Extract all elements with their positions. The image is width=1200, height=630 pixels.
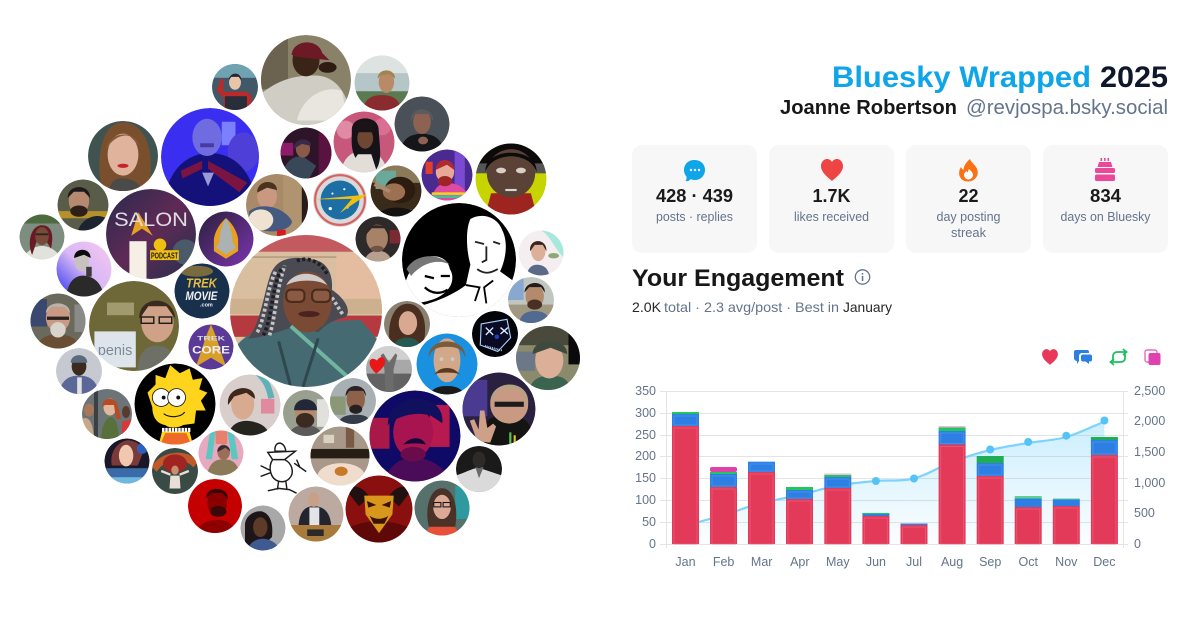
avatar: waving person with glasses xyxy=(462,372,536,446)
avatar: Trek Movie logo: MOVIE xyxy=(185,289,218,303)
avatar: shield badge xyxy=(198,212,254,266)
stat card: days on Bluesky xyxy=(1043,145,1168,253)
avatar: cartoon crew xyxy=(82,389,132,439)
avatar: smiling man with art wall xyxy=(220,374,280,436)
month labels: May xyxy=(826,555,850,569)
avatar: cartoon man on yellow xyxy=(476,144,546,214)
icon: replies legend xyxy=(1074,350,1092,364)
bars: Sep xyxy=(977,456,1004,544)
avatar: presenter at podium xyxy=(288,486,344,542)
month labels: Nov xyxy=(1055,555,1078,569)
avatar: Trek Core logo: TREK xyxy=(197,336,225,343)
profile name and handle: Joanne Robertson xyxy=(780,97,957,119)
icon: likes legend xyxy=(1042,349,1058,365)
engagement summary: January xyxy=(843,299,892,315)
left axis labels: 100 xyxy=(635,493,656,507)
month labels: Mar xyxy=(751,555,772,569)
avatar: man in grey cap, street xyxy=(516,326,580,390)
avatar: Trek Movie logo: .com xyxy=(200,302,213,308)
avatar: man on blue background with moustache xyxy=(416,334,478,394)
avatar: dark-haired man xyxy=(356,216,400,262)
left axis labels: 250 xyxy=(635,428,656,442)
stat card: likes xyxy=(769,145,894,253)
stacked bars xyxy=(672,412,1118,544)
stat card: likes: 1.7K xyxy=(812,186,850,206)
engagement summary: total · 2.3 avg/post · Best in xyxy=(664,299,839,315)
left axis labels xyxy=(635,384,656,551)
avatar: Trek Movie logo: TREK xyxy=(186,276,218,291)
avatar: older man with glasses xyxy=(30,294,86,348)
bars: Jul xyxy=(900,524,928,544)
avatar: woman with glasses xyxy=(414,480,470,536)
avatar: woman in dark xyxy=(394,96,450,152)
icon: chat bubble xyxy=(684,160,705,181)
avatar: star fleet logo xyxy=(313,173,367,227)
stat card: posts and replies xyxy=(632,145,757,253)
combo chart: monthly engagement xyxy=(635,384,1165,569)
cumulative area and line xyxy=(686,416,1108,544)
avatar: woman in white xyxy=(20,214,64,260)
bars: Aug xyxy=(939,426,966,544)
avatar: Trek Movie logo xyxy=(174,264,230,318)
month labels: Aug xyxy=(941,555,963,569)
avatar: bearded man in cap xyxy=(283,390,329,436)
left axis labels: 0 xyxy=(649,537,656,551)
avatar: bearded man xyxy=(58,180,108,230)
avatar: man holding sign: penis xyxy=(98,343,132,359)
engagement summary: 2.0K xyxy=(632,299,662,315)
avatar: man holding sign xyxy=(89,281,179,371)
stat card: posts and replies: posts · replies xyxy=(656,210,733,224)
avatar: Trek Core logo xyxy=(188,324,234,370)
avatar: man with pale teal background xyxy=(518,230,564,276)
right axis labels: 500 xyxy=(1134,506,1155,520)
avatar: main portrait, woman with grey braids xyxy=(230,235,382,387)
engagement summary xyxy=(632,299,892,315)
icon: heart xyxy=(821,159,843,181)
bars: Nov xyxy=(1053,498,1080,544)
month labels xyxy=(675,555,1116,569)
left axis labels: 300 xyxy=(635,406,656,420)
avatar: woman in plaid xyxy=(240,506,286,550)
stat card: streak: streak xyxy=(951,226,987,240)
bars: Apr xyxy=(786,487,813,544)
left axis labels: 50 xyxy=(642,515,656,529)
icon: cake xyxy=(1095,158,1115,181)
avatar: Trek Core logo: CORE xyxy=(192,344,230,356)
bars: Mar xyxy=(748,461,775,544)
avatar: man with a cap, beach xyxy=(508,277,554,323)
right axis labels: 0 xyxy=(1134,537,1141,551)
avatar: line-drawn doodle xyxy=(251,438,311,498)
stat card: days on Bluesky: 834 xyxy=(1090,186,1121,206)
avatar: man in red cap xyxy=(261,35,351,125)
avatar: blond man outdoors xyxy=(354,56,410,110)
avatar: woman with red lips xyxy=(88,121,158,191)
avatar: smiling woman brown hair xyxy=(384,301,430,347)
avatar: man with plush whale xyxy=(246,174,308,236)
avatar cluster xyxy=(20,35,580,550)
avatar: rainbow cartoon xyxy=(422,150,472,200)
icon: reposts legend xyxy=(1110,349,1126,365)
heading: your engagement: Your Engagement xyxy=(632,265,844,292)
profile name and handle xyxy=(780,97,1168,119)
avatar: speaker with mic xyxy=(280,128,332,178)
grid lines xyxy=(660,391,1128,548)
left axis labels: 200 xyxy=(635,449,656,463)
month labels: Sep xyxy=(979,555,1001,569)
profile name and handle: @revjospa.bsky.social xyxy=(966,97,1168,119)
avatar: woman in colorful hall xyxy=(198,430,244,476)
avatar: glowing mask xyxy=(472,311,518,357)
stat card: streak: day posting xyxy=(936,210,1001,224)
avatar: man on red duotone xyxy=(188,479,242,533)
bars: Jun xyxy=(862,513,889,544)
avatar: cartoon officer xyxy=(212,64,258,110)
title: Bluesky Wrapped xyxy=(832,61,1091,94)
right axis labels: 1,500 xyxy=(1134,445,1165,459)
avatar: red-haired illustrated figure xyxy=(152,448,198,494)
month labels: Jan xyxy=(675,555,696,569)
avatar: man with cap, building xyxy=(330,378,376,424)
avatar: man in blue light xyxy=(161,108,259,206)
right axis labels: 2,500 xyxy=(1134,384,1165,398)
avatar: black and white shirt xyxy=(456,446,502,492)
stat card: likes: likes received xyxy=(794,210,869,224)
avatar: purple gradient man xyxy=(56,242,112,296)
avatar: faceless illustrated woman xyxy=(104,438,150,484)
bars: Feb xyxy=(710,467,737,544)
icon: flame xyxy=(959,159,978,182)
stat card: streak: 22 xyxy=(958,186,979,206)
bars: Dec xyxy=(1091,437,1118,544)
month labels: Jun xyxy=(866,555,886,569)
month labels: Dec xyxy=(1093,555,1116,569)
title: 2025 xyxy=(1100,61,1168,94)
bars: Jan xyxy=(672,412,699,544)
avatar: pink background woman xyxy=(334,112,394,172)
avatar: Salon podcast logo xyxy=(106,189,198,279)
avatar: red devil mask xyxy=(346,476,412,542)
avatar: man in duotone red and blue xyxy=(370,390,460,482)
stat card: streak xyxy=(906,145,1031,253)
left axis labels: 150 xyxy=(635,471,656,485)
month labels: Feb xyxy=(713,555,734,569)
stat card: days on Bluesky: days on Bluesky xyxy=(1060,210,1151,224)
avatar: curly hair woman xyxy=(370,166,422,216)
month labels: Apr xyxy=(790,555,810,569)
icon: quotes legend xyxy=(1145,350,1160,365)
avatar: Salon podcast logo: PODCAST xyxy=(151,251,178,260)
month labels: Oct xyxy=(1018,555,1038,569)
left axis labels: 350 xyxy=(635,384,656,398)
avatar: two comic portraits xyxy=(402,203,516,317)
avatar: man in cap, purple jacket xyxy=(56,348,102,394)
stat card: posts and replies: 428 · 439 xyxy=(656,186,733,206)
avatar: black and white with red heart xyxy=(366,346,412,392)
avatar: plated food xyxy=(310,426,370,489)
month labels: Jul xyxy=(906,555,922,569)
avatar: Salon podcast logo: SALON xyxy=(114,209,188,231)
icon: info xyxy=(855,270,870,284)
right axis labels: 2,000 xyxy=(1134,414,1165,428)
right axis labels: 1,000 xyxy=(1134,476,1165,490)
legend icons xyxy=(1042,349,1160,365)
avatar: Lisa Simpson cartoon xyxy=(134,364,216,444)
right axis labels xyxy=(1134,384,1165,551)
bars: May xyxy=(824,474,851,544)
bars: Oct xyxy=(1015,496,1042,544)
